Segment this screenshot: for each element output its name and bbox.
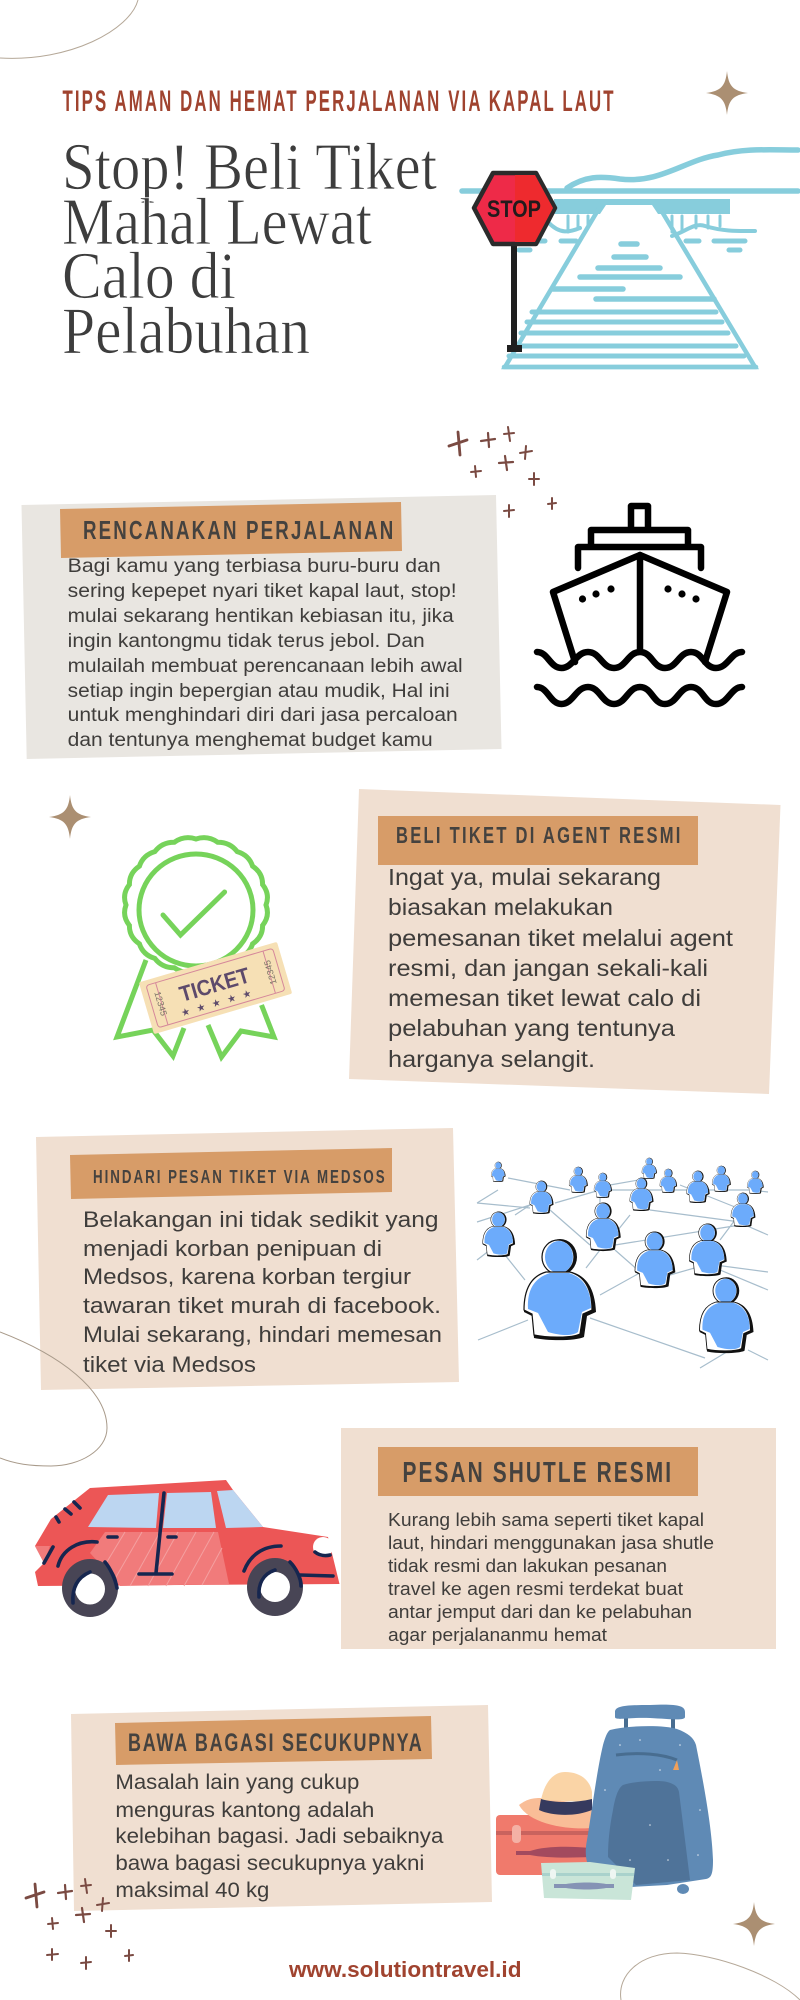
panel: hindari pesan tiket via medsos [36, 1128, 459, 1390]
body text: antar jemput dari dan ke pelabuhan [388, 1601, 692, 1622]
icon: certified ticket badge: 12345 [152, 990, 169, 1017]
body text: pemesanan tiket melalui agent [388, 925, 734, 951]
decorative arc: bottom right [621, 1953, 800, 2000]
illustration: people network [477, 1158, 768, 1368]
body text: resmi, dan jangan sekali-kali [388, 955, 708, 981]
body text: travel ke agen resmi terdekat buat [388, 1578, 683, 1599]
body text: dan tentunya menghemat budget kamu [68, 730, 433, 751]
icon: certified ticket badge [117, 838, 292, 1057]
decorative arc: left middle [0, 1332, 107, 1466]
panel: pesan shutle resmi [341, 1428, 776, 1649]
body text: ingin kantongmu tidak terus jebol. Dan [68, 631, 425, 652]
body text: menjadi korban penipuan di [83, 1236, 382, 1261]
footer: website: www.solutiontravel.id [288, 1957, 522, 1982]
heading text: BELI TIKET DI AGENT RESMI [396, 823, 680, 849]
illustration: luggage and hat [496, 1705, 713, 1900]
body text: Belakangan ini tidak sedikit yang [83, 1207, 438, 1232]
body text: mulai sekarang hentikan kebiasan itu, jika [68, 606, 454, 627]
body text: sering kepepet nyari tiket kapal laut, stop! [68, 581, 457, 602]
heading bar [60, 502, 402, 558]
title: Mahal Lewat [62, 185, 372, 259]
body text: Kurang lebih sama seperti tiket kapal [388, 1509, 704, 1530]
icon: stop sign: STOP [487, 196, 541, 223]
heading bar [378, 1447, 698, 1496]
heading bar [115, 1716, 432, 1765]
sparkles: upper cluster [449, 427, 556, 517]
body text: tiket via Medsos [83, 1352, 256, 1377]
body text: setiap ingin bepergian atau mudik, Hal ini [68, 681, 450, 702]
title [62, 130, 437, 368]
body text: tawaran tiket murah di facebook. [83, 1293, 441, 1318]
panel: rencanakan perjalanan [22, 495, 502, 759]
decorative arc: top left [0, 0, 138, 58]
icon: ship [537, 506, 742, 704]
body text: menguras kantong adalah [115, 1799, 374, 1822]
heading bar [378, 816, 698, 865]
icon: star top right [706, 71, 748, 115]
title: Calo di [62, 239, 236, 313]
body text [68, 556, 463, 751]
heading text: HINDARI PESAN TIKET VIA MEDSOS [93, 1167, 385, 1188]
body text: untuk menghindari diri dari jasa percaloan [68, 705, 458, 726]
title: Pelabuhan [62, 294, 310, 368]
body text: kelebihan bagasi. Jadi sebaiknya [115, 1825, 444, 1848]
title: Stop! Beli Tiket [62, 130, 437, 204]
body text: agar perjalananmu hemat [388, 1624, 607, 1645]
body text: maksimal 40 kg [115, 1879, 269, 1902]
panel: beli tiket di agent resmi [349, 789, 780, 1094]
body text: laut, hindari menggunakan jasa shutle [388, 1532, 714, 1553]
body text: Ingat ya, mulai sekarang [388, 864, 661, 890]
icon: certified ticket badge: 12345 [262, 959, 279, 986]
heading text: PESAN SHUTLE RESMI [402, 1457, 671, 1489]
body text [388, 1509, 714, 1645]
body text: harganya selangit. [388, 1046, 595, 1072]
body text: mulailah membuat perencanaan lebih awal [68, 656, 463, 677]
icon: stop sign [474, 173, 555, 352]
illustration: red car [35, 1480, 340, 1617]
icon: certified ticket badge: ★★★★★ [180, 986, 260, 1019]
sparkles: lower cluster [26, 1879, 133, 1969]
body text: biasakan melakukan [388, 894, 613, 920]
body text: Mulai sekarang, hindari memesan [83, 1322, 442, 1347]
heading: tips: TIPS AMAN DAN HEMAT PERJALANAN VIA KAPAL LAUT [62, 85, 614, 118]
body text: Bagi kamu yang terbiasa buru-buru dan [68, 556, 441, 577]
heading text: BAWA BAGASI SECUKUPNYA [128, 1728, 422, 1757]
body text: Medsos, karena korban tergiur [83, 1264, 411, 1289]
icon: star bottom right [733, 1902, 775, 1946]
body text: Masalah lain yang cukup [115, 1771, 359, 1794]
body text [388, 864, 734, 1072]
heading bar [70, 1148, 392, 1199]
body text [83, 1207, 442, 1377]
icon: star left [49, 795, 91, 839]
body text: pelabuhan yang tentunya [388, 1015, 675, 1041]
body text: memesan tiket lewat calo di [388, 985, 701, 1011]
body text: tidak resmi dan lakukan pesanan [388, 1555, 667, 1576]
panel: bawa bagasi secukupnya [71, 1705, 492, 1911]
heading text: RENCANAKAN PERJALANAN [83, 515, 393, 545]
icon: certified ticket badge: TICKET [176, 962, 253, 1007]
body text: bawa bagasi secukupnya yakni [115, 1852, 424, 1875]
illustration: pier [462, 150, 798, 367]
body text [115, 1771, 444, 1902]
